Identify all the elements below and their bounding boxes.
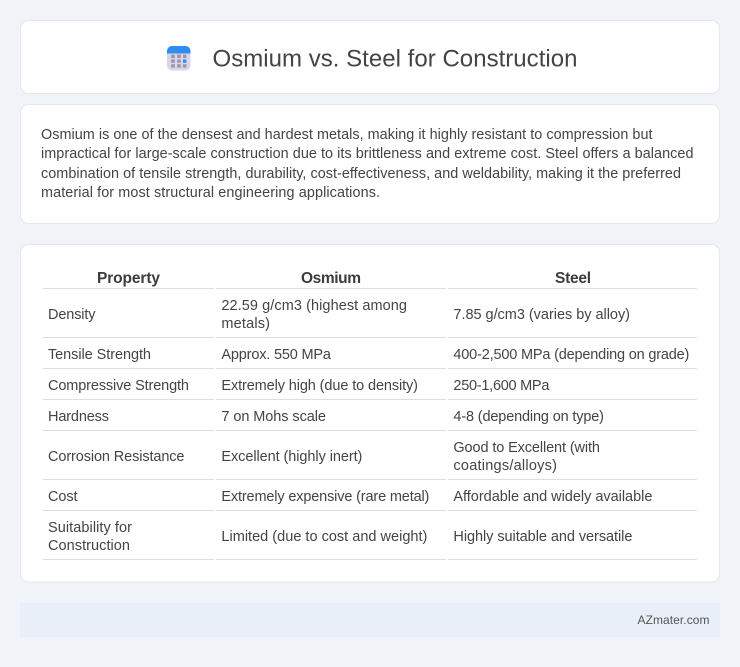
footer credit: AZmater.com [638,613,710,627]
row: cost [43,489,697,510]
row: corrosion resistance: Excellent (highly inert) [221,449,362,465]
row: tensile strength: 400-2,500 MPa (depending on grade) [453,347,689,363]
title: Osmium vs. Steel for Construction [212,46,578,72]
row: corrosion resistance: Good to Excellent (with [453,440,600,456]
row: hardness: 4-8 (depending on type) [453,409,604,425]
row: density: 7.85 g/cm3 (varies by alloy) [453,307,630,323]
panel: comparison table [20,244,720,582]
row: corrosion resistance: Corrosion Resistance [48,449,184,465]
row: suitability for construction: Construction [48,538,130,554]
summary text: combination of tensile strength, durability, cost-effectiveness, and weldability, making it the preferred [41,166,681,182]
row: hardness: 7 on Mohs scale [221,409,326,425]
row: density: 22.59 g/cm3 (highest among [221,298,407,314]
table header [43,270,697,288]
panel: summary [20,104,720,224]
summary text: material for most structural engineering applications. [41,185,380,201]
row: compressive strength [43,378,697,400]
panel: title card [20,20,720,94]
row: compressive strength: 250-1,600 MPa [453,378,550,394]
row: hardness: Hardness [48,409,109,425]
row: density [43,298,697,338]
row: suitability for construction: Suitability for [48,520,132,536]
row: cost: Extremely expensive (rare metal) [221,489,429,505]
summary text [41,127,694,201]
footer bar [20,603,720,637]
row: cost: Cost [48,489,78,505]
row: density: metals) [221,316,270,332]
icon: calendar [167,46,190,70]
table header: Osmium [301,270,361,287]
row: tensile strength [43,347,697,368]
row: suitability for construction: Limited (due to cost and weight) [221,529,427,545]
summary text: Osmium is one of the densest and hardest metals, making it highly resistant to compression but [41,127,652,143]
row: compressive strength: Compressive Strength [48,378,189,394]
row: cost: Affordable and widely available [453,489,652,505]
row: suitability for construction [43,520,697,560]
row: suitability for construction: Highly suitable and versatile [453,529,632,545]
row: corrosion resistance [43,440,697,480]
row: density: Density [48,307,96,323]
row: corrosion resistance: coatings/alloys) [453,458,557,474]
table header: Property [97,270,160,287]
row: compressive strength: Extremely high (due to density) [221,378,418,394]
row: hardness [43,409,697,430]
summary text: impractical for large-scale construction due to its brittleness and extreme cost. Steel offers a balanced [41,146,694,162]
table header: Steel [555,270,591,287]
row: tensile strength: Tensile Strength [48,347,151,363]
row: tensile strength: Approx. 550 MPa [221,347,332,363]
